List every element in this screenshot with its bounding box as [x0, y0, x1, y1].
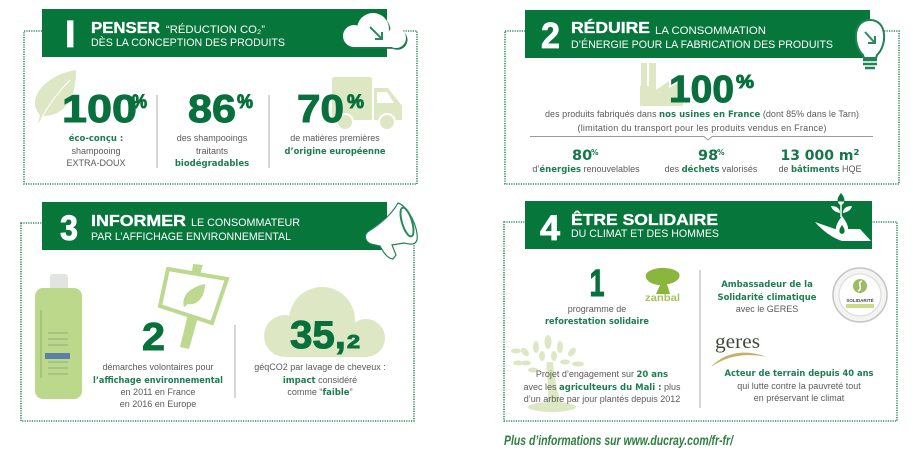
header 2: D’ÉNERGIE POUR LA FABRICATION DES PRODUITS [571, 38, 833, 51]
stat: 86%: biodégradables [175, 158, 249, 169]
stat: 70% [284, 88, 386, 157]
footer link text: Plus d’informations sur www.ducray.com/fr-fr/ [504, 432, 735, 448]
text: Mali project: d’un arbre par jour plantés depuis 2012 [524, 394, 680, 404]
stat: 35,2 [254, 314, 386, 398]
icon: light bulb [856, 20, 884, 68]
text: field actor: qui lutte contre la pauvreté tout [737, 381, 861, 391]
stat: 100% made in France: % [736, 72, 754, 92]
stat: 2 approaches: en 2011 en France [121, 387, 195, 397]
logo: zanbal: zanbal [645, 293, 680, 304]
badge: solidarité climatique: SOLIDARITÉ [846, 296, 874, 303]
stat: 1 programme: 1 [590, 263, 604, 305]
stat: 86% [175, 88, 253, 169]
stat: 2 approaches: démarches volontaires pour [102, 362, 214, 372]
stat: 35,2: impact considéré [283, 375, 357, 386]
stat: 100% made in France: 100 [669, 69, 734, 111]
text: field actor: en préservant le climat [754, 393, 845, 403]
icon: sign with leaf [160, 264, 227, 349]
stat: 100%: éco-conçu : [69, 133, 123, 144]
stat: 2 approaches: en 2016 en Europe [120, 399, 196, 409]
product: shampoo bottle [35, 274, 82, 399]
header 3: 3 [60, 209, 78, 248]
stat: 35,2: 2 [347, 332, 360, 352]
text: field actor [724, 369, 874, 403]
stat: 100% made in France [545, 69, 859, 133]
header 3: PAR L’AFFICHAGE ENVIRONNEMENTAL [91, 231, 291, 243]
icon: cloud [264, 287, 385, 357]
stat: 100%: % [132, 92, 147, 113]
stat: 98%: 98 [698, 148, 718, 164]
icon: truck [332, 77, 402, 130]
header 1: I [65, 14, 76, 56]
header 4: ÊTRE SOLIDAIRE [571, 210, 718, 229]
text: Mali project: avec les agriculteurs du Mali : plus [523, 382, 681, 393]
header 2 [525, 10, 870, 58]
header 1: PENSER [91, 20, 160, 37]
panel 4: être solidaire [504, 193, 897, 421]
stat: 70%: d’origine européenne [284, 146, 386, 157]
header 3: LE CONSOMMATEUR [191, 217, 300, 229]
text: ambassador: Ambassadeur de la [721, 280, 813, 290]
stat: 2 approaches [93, 316, 223, 409]
stat: 100% made in France: (limitation du transport pour les produits vendus en France) [578, 123, 826, 133]
stat: 1 programme: reforestation solidaire [545, 317, 649, 327]
stat: 1 programme [545, 263, 649, 327]
stat: 1 programme: programme de [568, 304, 626, 314]
stat: 35,2: géqCO2 par lavage de cheveux : [254, 362, 386, 372]
stat: 100%: shampooing [71, 146, 121, 156]
logo: zanbal [645, 268, 680, 304]
icon: leaf [35, 70, 76, 124]
header 4 [525, 201, 872, 249]
stat: 98%: % [717, 148, 725, 157]
header 2: LA CONSOMMATION [655, 25, 766, 37]
stat: 13 000 m²: 13 000 m² [780, 148, 860, 164]
stat: 70%: de matières premières [290, 133, 380, 143]
text: Mali project: Projet d’engagement sur 20 ans [536, 369, 668, 380]
stat: 80% [532, 148, 640, 175]
badge: solidarité climatique [833, 268, 887, 322]
text: ambassador: Solidarité climatique [718, 292, 817, 303]
text: ambassador [718, 280, 817, 314]
stat: 2 approaches: 2 [142, 316, 165, 359]
stat: 100%: 100 [62, 88, 137, 131]
stat: 2 approaches: l’affichage environnemental [93, 376, 223, 386]
stat: 100% made in France: des produits fabriqués dans nos usines en France (dont 85% dans le Tarn) [545, 109, 859, 120]
header 1: “RÉDUCTION CO₂” [166, 23, 265, 36]
icon: pale tree [511, 335, 584, 412]
icon: megaphone [365, 203, 417, 259]
logo: geres [711, 331, 767, 367]
stat: 70%: % [347, 92, 364, 113]
stat: 100%: EXTRA-DOUX [66, 158, 126, 168]
stat: 70%: 70 [297, 88, 344, 131]
stat: 98% [665, 148, 758, 175]
header 1: DÈS LA CONCEPTION DES PRODUITS [91, 36, 285, 49]
text: Mali project [523, 369, 681, 404]
logo: geres: geres [715, 331, 760, 353]
icon: hand with seedling [815, 193, 871, 241]
header 2: RÉDUIRE [571, 18, 650, 37]
stat: 80%: d’énergies renouvelables [532, 164, 640, 175]
icon: factory [640, 63, 683, 106]
stat: 86%: 86 [188, 88, 236, 131]
header 2: 2 [541, 15, 560, 56]
stat: 13 000 m² [778, 148, 862, 175]
header 4: 4 [540, 209, 561, 248]
stat: 100% [62, 88, 147, 168]
stat: 86%: % [237, 92, 253, 113]
header 1 [42, 9, 387, 57]
header 3 [42, 202, 387, 250]
stat: 86%: traitants [196, 146, 229, 156]
text: ambassador: avec le GERES [736, 304, 798, 314]
stat: 98%: des déchets valorisés [665, 164, 758, 175]
stat: 80%: 80 [572, 148, 592, 164]
text: field actor: Acteur de terrain depuis 40 ans [724, 369, 874, 379]
header 3: INFORMER [91, 213, 186, 230]
stat: 86%: des shampooings [177, 133, 248, 143]
panel 3: informer [21, 202, 417, 421]
stat: 35,2: comme “faible” [287, 387, 353, 398]
stat: 13 000 m²: de bâtiments HQE [778, 164, 862, 175]
panel 2: réduire [505, 10, 899, 184]
panel 1: penser [24, 9, 417, 184]
stat: 35,2: 35, [290, 314, 346, 357]
header 4: DU CLIMAT ET DES HOMMES [571, 228, 719, 240]
icon: cloud with arrow [343, 13, 408, 50]
stat: 80%: % [591, 148, 599, 157]
